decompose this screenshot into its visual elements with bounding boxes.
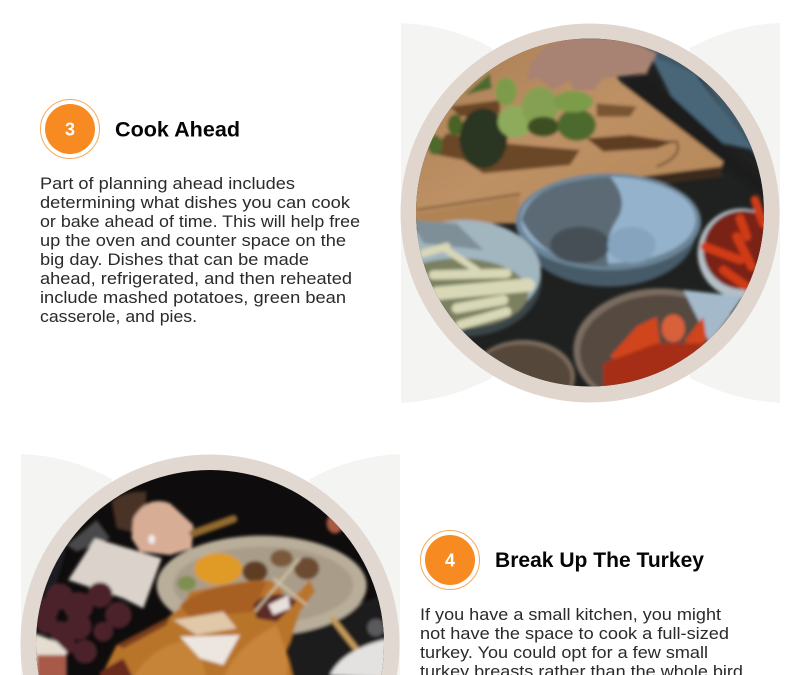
beige circular frame <box>20 454 400 675</box>
body text: cook ahead: determining what dishes you can cook <box>40 194 351 212</box>
body text: break up the turkey: If you have a small kitchen, you might <box>420 606 721 624</box>
right bowl with peppers <box>695 206 764 299</box>
roast turkey body <box>100 580 315 675</box>
number badge 4: 4 <box>445 550 455 570</box>
plate <box>157 536 367 636</box>
trussed legs and string <box>253 594 297 622</box>
photo: turkey on table <box>30 462 390 675</box>
napkin <box>68 538 162 608</box>
bottom bowl <box>573 288 747 412</box>
grapes <box>35 582 132 664</box>
section 4: break up the turkey <box>420 530 748 675</box>
photo: bowls and cutting board <box>416 38 764 386</box>
body text: break up the turkey: not have the space to cook a full-sized <box>420 625 729 643</box>
left bowl <box>385 223 542 337</box>
table tone <box>67 520 110 552</box>
side dishes <box>194 553 242 585</box>
glass <box>367 619 385 636</box>
red pepper chunks <box>603 314 707 387</box>
decorative grey side shapes <box>401 23 780 403</box>
section 3: cook ahead <box>40 100 360 326</box>
number badge 3: 3 <box>65 120 75 140</box>
body text: cook ahead: big day. Dishes that can be made <box>40 251 309 269</box>
sleeve <box>636 45 754 157</box>
utensil handle <box>193 519 233 533</box>
cheese board items <box>30 632 67 675</box>
body text: cook ahead: Part of planning ahead includes <box>40 175 295 193</box>
white plate lower right <box>330 638 390 675</box>
broccoli <box>459 108 507 168</box>
hand <box>527 37 657 90</box>
body text: cook ahead: casserole, and pies. <box>40 308 197 326</box>
beige circular frame <box>400 24 780 402</box>
number badge 3 <box>40 100 100 158</box>
centre bowl <box>534 240 696 288</box>
gold knife <box>329 616 360 652</box>
body text: break up the turkey: turkey. You could opt for a few small <box>420 644 708 662</box>
photo panel: chopping vegetables <box>385 23 786 413</box>
decorative grey side shapes <box>21 454 400 675</box>
heading: break up the turkey: Break Up The Turkey <box>495 549 704 572</box>
photo panel: roast turkey <box>20 454 400 675</box>
body text: break up the turkey <box>420 606 748 675</box>
bottom-left bowl <box>484 338 577 386</box>
body text: cook ahead: include mashed potatoes, green bean <box>40 289 346 307</box>
green bean sticks <box>423 247 528 325</box>
body text: cook ahead: or bake ahead of time. This will help free <box>40 213 360 231</box>
heading: cook ahead: Cook Ahead <box>115 118 240 142</box>
shadows on board <box>430 133 580 173</box>
wrist <box>112 491 147 535</box>
red blur top right <box>327 513 343 533</box>
number badge 4 <box>420 530 480 590</box>
body text: cook ahead <box>40 175 360 326</box>
hand <box>132 501 193 555</box>
body text: cook ahead: up the oven and counter space on the <box>40 232 346 250</box>
cutting board <box>410 30 723 223</box>
body text: cook ahead: ahead, refrigerated, and then reheated <box>40 270 352 288</box>
